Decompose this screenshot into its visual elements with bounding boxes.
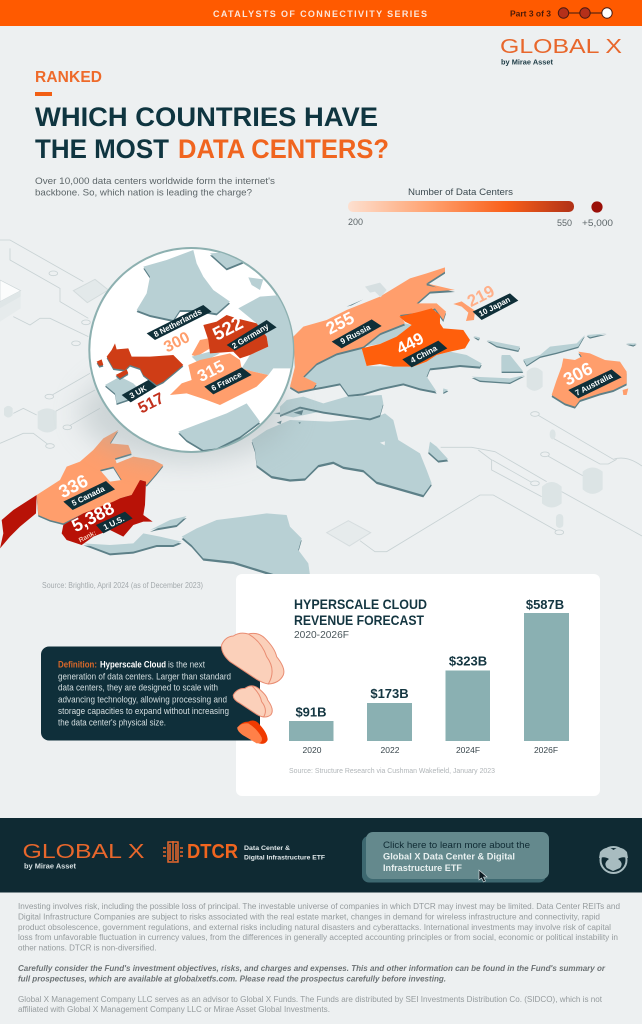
value: Japan 219: 219 [464, 281, 498, 311]
kicker: ranked: RANKED [35, 69, 102, 86]
map: Americas [0, 430, 310, 577]
disclaimer: adviser [18, 994, 603, 1014]
disclaimer: prospectus [18, 963, 606, 984]
label: 9 Russia: 9 Russia [339, 323, 373, 346]
top banner: CATALYSTS OF CONNECTIVITY SERIES [213, 9, 427, 19]
label: 2 Germany: 2 Germany [230, 321, 271, 351]
land: South America [182, 513, 310, 577]
label: 7 Australia [568, 369, 622, 398]
label: 10 Japan: 10 Japan [477, 295, 512, 319]
land: Ireland [105, 377, 143, 405]
callout: hyperscale cloud definition: Hyperscale Cloud [100, 660, 166, 670]
panel: hyperscale cloud revenue forecast [236, 574, 600, 796]
footer band [0, 818, 642, 892]
disclaimer: risk: Digital Infrastructure Companies are subject to risks associated with the real estate market, changes in demand for wireless infrastructure and connectivity, rapid [18, 912, 600, 922]
land: Scandinavia and Baltic [137, 250, 263, 322]
disclaimer: adviser: affiliated with Global X Management Company LLC or Mirae Asset Global Investments. [18, 1004, 330, 1014]
land: Asia [303, 323, 482, 397]
label: 4 China [402, 341, 447, 367]
value: Canada 336: 336 [55, 471, 91, 502]
map source: Source: Brightlio, April 2024 (as of December 2023) [42, 581, 203, 590]
disclaimer: risk [18, 901, 620, 952]
logo: Global X footer [22, 841, 144, 870]
disclaimer: adviser: Global X Management Company LLC serves as an advisor to Global X Funds. The Funds are distributed by SEI Investments Distribution Co. (SIDCO), which is not [18, 994, 603, 1004]
top banner [0, 0, 642, 26]
legend: number of data centers [348, 187, 613, 228]
land: Eastern Europe [238, 295, 294, 375]
land: Russia [290, 267, 455, 394]
logo: Global X footer: by Mirae Asset [24, 864, 77, 870]
callout: hyperscale cloud definition: generation of data centers. Larger than standard [58, 671, 231, 681]
callout: hyperscale cloud definition: Definition: [58, 660, 97, 670]
value: Russia 255: 255 [323, 307, 358, 338]
value: Germany 522: 522 [209, 312, 246, 345]
bar chart: 2026F [534, 745, 558, 755]
icon: globe [599, 847, 628, 873]
logo: DTCR: Data Center & [244, 845, 290, 852]
land: China [362, 308, 470, 367]
label: rank: Rank: [78, 530, 97, 544]
disclaimer: risk: loss from unfavorable fluctuation in currency values, from the differences in generally accepted accounting principles or from social, economic or political instability in [18, 932, 618, 942]
land: Canada [37, 430, 163, 525]
bar chart: $587B [526, 597, 564, 612]
bar chart: $173B [370, 686, 409, 701]
label: 10 Japan [473, 293, 518, 320]
label: 9 Russia [332, 319, 382, 348]
land: United Kingdom [97, 343, 183, 387]
callout: hyperscale cloud definition: storage capacities to expand without increasing [58, 706, 229, 716]
legend: number of data centers: 550 [557, 218, 572, 228]
value: Netherlands 300: 300 [161, 329, 193, 356]
land: Belgium [192, 352, 220, 362]
label: 6 France: 6 France [210, 370, 244, 393]
label: 5 Canada [63, 481, 115, 510]
bar chart: $323B [449, 654, 487, 668]
logo: Global X [500, 36, 622, 66]
label: 6 France [204, 367, 252, 394]
button: learn more: Infrastructure ETF [383, 863, 462, 874]
label: 5 Canada: 5 Canada [70, 484, 107, 508]
title [35, 102, 389, 164]
label: 1 U.S.: 1 U.S. [102, 514, 126, 532]
callout: hyperscale cloud definition: the data center's physical size. [58, 717, 166, 727]
logo: DTCR: DTCR [187, 840, 238, 863]
bar chart: $91B [295, 704, 327, 720]
label: 4 China: 4 China [409, 343, 439, 365]
title: THE MOST [35, 134, 169, 164]
disclaimer: risk: Investing involves risk, including the possible loss of principal. The investable universe of companies in which DTCR may invest may be limited. Data Center REITs and [18, 901, 620, 911]
land: Netherlands [192, 338, 210, 357]
bar chart: 2022 [381, 745, 400, 755]
bar chart [289, 597, 569, 755]
callout: hyperscale cloud definition [41, 646, 260, 740]
legend: number of data centers: Number of Data Centers [408, 187, 513, 198]
top banner: Part 3 of 3 [510, 10, 552, 18]
legend: number of data centers: +5,000 [582, 218, 613, 228]
logo: DTCR: Digital Infrastructure ETF [244, 854, 325, 862]
map: rest of world land [252, 267, 637, 497]
callout: hyperscale cloud definition: is the next [168, 660, 205, 670]
intro text [35, 176, 275, 198]
label: 7 Australia: 7 Australia [574, 371, 614, 398]
disclaimer: risk: product obsolescence, government regulations, and external risks including natural disasters and cyberattacks. International investments may involve risk of capital [18, 922, 611, 932]
land: Central America and Caribbean [83, 516, 187, 555]
kicker: ranked [35, 69, 102, 96]
land: United States [0, 480, 153, 548]
value: France 315: 315 [194, 356, 228, 386]
land: Japan [453, 301, 475, 321]
label: 3 UK: 3 UK [128, 384, 148, 400]
land: France [170, 353, 268, 405]
value: UK 517: 517 [136, 390, 167, 417]
disclaimer: risk: other nations. DTCR is non-diversified. [18, 942, 156, 952]
disclaimer: prospectus: Carefully consider the Fund's investment objectives, risks, and charges and expenses. This and other information can be found in the Fund's summary or [18, 963, 606, 973]
disclaimer: prospectus: full prospectuses, which are available at globalxetfs.com. Please read the prospectus carefully before investing. [18, 974, 446, 984]
logo: Global X footer: GLOBAL X [22, 841, 144, 863]
value: Australia 306: 306 [560, 358, 596, 390]
title: DATA CENTERS? [178, 134, 389, 164]
value: US 5,388: 5,388 [68, 498, 118, 536]
callout: hyperscale cloud definition: advancing technology, allowing processing and [58, 695, 227, 705]
chart title [294, 596, 427, 641]
intro text: backbone. So, which nation is leading the charge? [35, 188, 252, 198]
land: Arabia [280, 395, 383, 420]
circuit decorations [0, 240, 642, 552]
label: 1 U.S. [96, 512, 133, 533]
logo: Global X: by Mirae Asset [501, 60, 554, 66]
land: Spain [178, 403, 260, 452]
chart title: HYPERSCALE CLOUD [294, 596, 427, 612]
chart source: Source: Structure Research via Cushman Wakefield, January 2023 [289, 766, 495, 775]
value: China 449: 449 [393, 329, 427, 358]
bar chart: 2024F [456, 745, 480, 755]
button: learn more: Global X Data Center & Digital [383, 852, 515, 862]
chart title: 2020-2026F [294, 629, 349, 641]
intro text: Over 10,000 data centers worldwide form the internet's [35, 176, 275, 187]
chart title: REVENUE FORECAST [294, 612, 424, 628]
logo: DTCR [163, 840, 325, 863]
icon: cursor [479, 870, 487, 882]
land: Southeast Asia islands [443, 333, 637, 394]
land: Germany [203, 315, 268, 358]
title: WHICH COUNTRIES HAVE [35, 102, 378, 132]
legend: number of data centers: 200 [348, 217, 363, 227]
zoom inset: Europe [80, 248, 294, 462]
icon: clouds [222, 633, 284, 744]
callout: hyperscale cloud definition: data centers, they are designed to scale with [58, 683, 218, 693]
land: Australia [552, 352, 628, 409]
button: learn more: Click here to learn more about the [383, 840, 530, 851]
land: Madagascar [428, 442, 448, 463]
land: Africa [252, 403, 432, 497]
logo: Global X: GLOBAL X [500, 36, 622, 58]
label: 8 Netherlands: 8 Netherlands [152, 307, 204, 339]
bar chart: 2020 [303, 745, 322, 755]
button: learn more [362, 832, 549, 882]
label: 3 UK [122, 380, 157, 402]
